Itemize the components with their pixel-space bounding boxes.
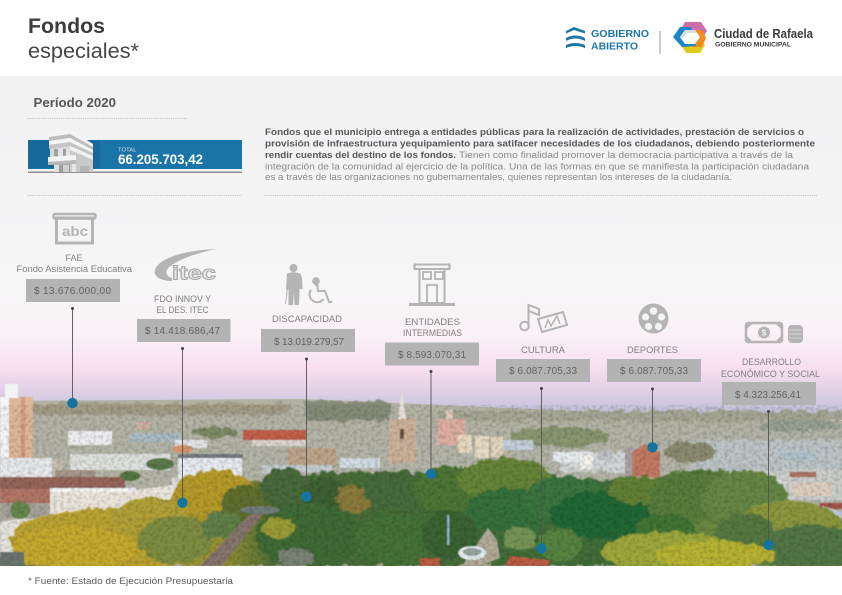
item: DISCAPACIDAD: DISCAPACIDAD bbox=[272, 314, 343, 324]
tan blocks right bbox=[437, 419, 465, 445]
period heading: Período 2020 bbox=[34, 95, 116, 110]
description text: Fondos que el municipio entrega a entidades públicas para la realización de actividades, prestación de servicios o bbox=[265, 127, 805, 137]
icon: civic building bbox=[409, 264, 455, 306]
item: DEPORTES: DEPORTES bbox=[627, 345, 678, 355]
icon: itec logo: itec bbox=[172, 264, 217, 284]
item: FDO INNOV ITEC: $ 14.418.686,47 bbox=[145, 326, 220, 337]
item: DISCAPACIDAD bbox=[261, 264, 355, 502]
church bbox=[388, 390, 416, 464]
item: FDO INNOV ITEC: FDO INNOV Y bbox=[154, 294, 211, 304]
logo: Ciudad de Rafaela: GOBIERNO MUNICIPAL bbox=[715, 42, 791, 48]
icon: abc board: abc bbox=[62, 223, 88, 239]
item: DESARROLLO ECONOMICO Y SOCIAL: ECONÓMICO Y SOCIAL bbox=[721, 369, 820, 379]
item: CULTURA bbox=[496, 305, 590, 554]
icon: building bbox=[48, 129, 93, 172]
item: DESARROLLO ECONOMICO Y SOCIAL: DESARROLLO bbox=[742, 357, 801, 367]
background sky band bbox=[0, 76, 842, 416]
total panel: 66.205.703,42 bbox=[118, 152, 203, 167]
item: FDO INNOV ITEC bbox=[137, 249, 230, 508]
item: CULTURA: CULTURA bbox=[521, 345, 565, 355]
description text: integración de la comunidad al ejercicio de la política. Una de las formas en que se manifiesta la participación ciudadana bbox=[265, 162, 809, 172]
aerial city photo bbox=[0, 384, 842, 574]
logo divider bbox=[660, 31, 661, 54]
title bbox=[28, 15, 139, 63]
description text: provisión de infraestructura yequipamiento para satifacer necesidades de los ciudadanos, debiendo posteriormente bbox=[265, 138, 815, 148]
footnote: * Fuente: Estado de Ejecución Presupuestaria bbox=[28, 576, 234, 587]
tree canopy underlay bbox=[8, 464, 842, 566]
item: FAE: FAE bbox=[65, 253, 83, 263]
total panel bbox=[28, 129, 242, 173]
item: DEPORTES bbox=[607, 304, 701, 452]
item: ENTIDADES INTERMEDIAS: INTERMEDIAS bbox=[403, 328, 462, 338]
item: DESARROLLO ECONOMICO Y SOCIAL: $ 4.323.256,41 bbox=[735, 390, 801, 401]
trees bbox=[0, 458, 842, 574]
item: ENTIDADES INTERMEDIAS: $ 8.593.070,31 bbox=[398, 350, 466, 361]
description text: rendir cuentas del destino de los fondos. bbox=[265, 150, 456, 160]
item: FDO INNOV ITEC: EL DES. ITEC bbox=[156, 305, 209, 315]
description text: Tienen como finalidad promover la democracia participativa a través de la bbox=[459, 150, 793, 160]
logo: Gobierno Abierto: ABIERTO bbox=[591, 40, 638, 52]
icon: itec logo bbox=[155, 249, 217, 284]
total panel: TOTAL bbox=[118, 148, 136, 154]
icon: music note and ticket bbox=[520, 305, 567, 332]
logo: Ciudad de Rafaela bbox=[673, 22, 814, 53]
item: ENTIDADES INTERMEDIAS: ENTIDADES bbox=[405, 317, 460, 327]
icon: football bbox=[638, 304, 668, 334]
icon: elderly person and wheelchair bbox=[286, 264, 332, 305]
item: DISCAPACIDAD: $ 13.019.279,57 bbox=[274, 337, 344, 348]
item: DESARROLLO ECONOMICO Y SOCIAL bbox=[721, 323, 820, 550]
logo: Gobierno Abierto: GOBIERNO bbox=[591, 28, 649, 40]
description text bbox=[265, 127, 815, 182]
icon: banknote and coins bbox=[746, 323, 803, 343]
logo: Gobierno Abierto bbox=[566, 27, 649, 52]
item: FAE bbox=[16, 214, 132, 408]
icon: banknote and coins: $ bbox=[762, 328, 767, 338]
left buildings bbox=[0, 458, 52, 478]
footer white panel bbox=[0, 566, 842, 595]
icon: abc board bbox=[54, 214, 96, 243]
item: DEPORTES: $ 6.087.705,33 bbox=[620, 366, 688, 377]
item: CULTURA: $ 6.087.705,33 bbox=[509, 366, 577, 377]
item: FAE: Fondo Asistencia Educativa bbox=[16, 264, 132, 274]
item: ENTIDADES INTERMEDIAS bbox=[385, 264, 479, 479]
title: especiales* bbox=[28, 40, 139, 63]
tower bbox=[8, 397, 33, 458]
description text: es a través de las organizaciones no gubernamentales, quienes representan los intereses de la ciudadanía. bbox=[265, 172, 732, 182]
logo: Ciudad de Rafaela: Ciudad de Rafaela bbox=[714, 26, 814, 41]
item: FAE: $ 13.676.000,00 bbox=[34, 286, 111, 297]
title: Fondos bbox=[28, 15, 105, 38]
header white panel bbox=[0, 0, 842, 76]
